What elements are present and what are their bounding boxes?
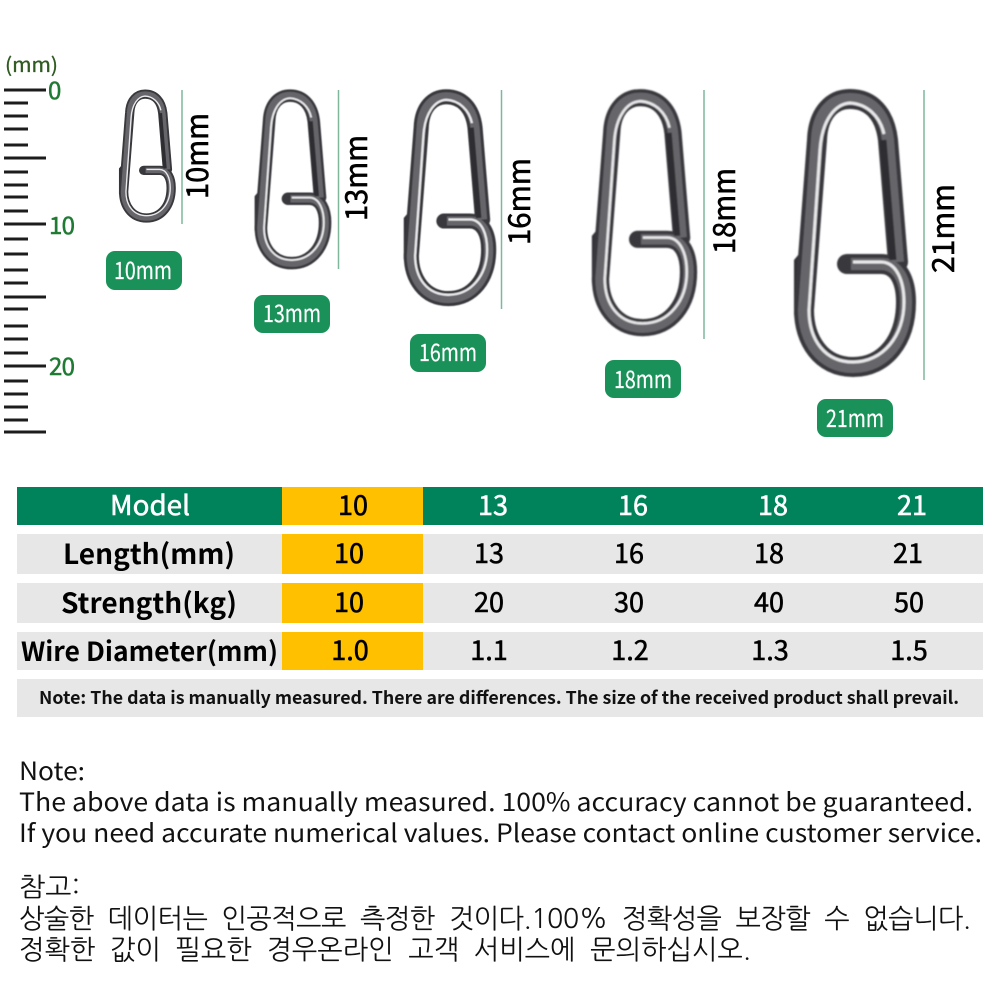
korean note: 참고: [19,874,80,900]
ring: 10mm [119,94,171,218]
table header row: Model [110,484,190,523]
dimension: 18mm: 18mm [700,168,744,254]
table row: strength: 40 [754,581,784,620]
table row: wire diameter: Wire Diameter(mm) [21,630,278,669]
badge: 16mm: 16mm [419,333,477,368]
table row: strength [17,581,983,623]
table note row: Note: The data is manually measured. There are differences. The size of the received product shall prevail. [39,685,959,710]
table row: wire diameter: 1.3 [751,629,789,668]
korean note [19,874,971,963]
dimension: 21mm: 21mm [919,184,963,273]
table row: strength: 20 [474,581,504,620]
badge: 10mm: 10mm [114,251,172,286]
dimension: 13mm: 13mm [332,135,376,221]
ruler ticks [4,90,46,432]
table header row: 16 [618,484,648,523]
english note [19,752,982,850]
ring: 13mm [255,96,325,263]
dimension: 10mm [173,90,217,224]
ring: 21mm [794,99,906,367]
ring: 18mm [592,98,689,328]
table row: strength: 30 [614,581,644,620]
table row: length: 10 [334,532,364,571]
badge: 21mm: 21mm [826,399,884,434]
table header row: 18 [758,484,788,523]
ruler numbers [48,71,75,382]
table header row [17,484,983,525]
korean note: 정확한 값이 필요한 경우온라인 고객 서비스에 문의하십시오. [19,936,751,963]
ruler numbers: 10 [49,206,75,241]
table row: wire diameter: 1.0 [331,629,369,668]
table row: length: Length(mm) [63,532,235,572]
table row: strength: Strength(kg) [61,581,237,621]
table header row: 21 [897,484,927,523]
ruler unit label: (mm) [5,49,58,78]
table row: strength: 50 [894,581,924,620]
table row: length: 18 [754,532,784,571]
dimension: 10mm: 10mm [173,113,217,199]
ruler numbers: 20 [49,347,75,382]
ring: 16mm [404,97,489,299]
english note: If you need accurate numerical values. Please contact online customer service. [19,814,982,850]
spec table [17,484,983,717]
dimension: 16mm: 16mm [495,158,539,245]
table row: length: 16 [614,532,644,571]
table row: wire diameter: 1.5 [890,629,928,668]
table header row: 13 [478,484,508,523]
table header row: 10 [338,484,368,523]
table row: wire diameter: 1.2 [611,629,649,668]
ruler numbers: 0 [48,71,61,106]
badge: 13mm: 13mm [263,294,321,329]
badge: 18mm: 18mm [614,360,672,395]
table row: length [17,532,983,574]
table row: length: 21 [893,532,923,571]
table row: length: 13 [474,532,504,571]
table note row [17,679,983,717]
english note: The above data is manually measured. 100% accuracy cannot be guaranteed. [19,783,973,819]
korean note: 상술한 데이터는 인공적으로 측정한 것이다.100% 정확성을 보장할 수 없습니다. [19,905,971,932]
english note: Note: [19,752,85,788]
table row: wire diameter: 1.1 [470,629,508,668]
table row: wire diameter [17,629,983,670]
ruler scale [4,49,75,432]
table row: strength: 10 [334,581,364,620]
